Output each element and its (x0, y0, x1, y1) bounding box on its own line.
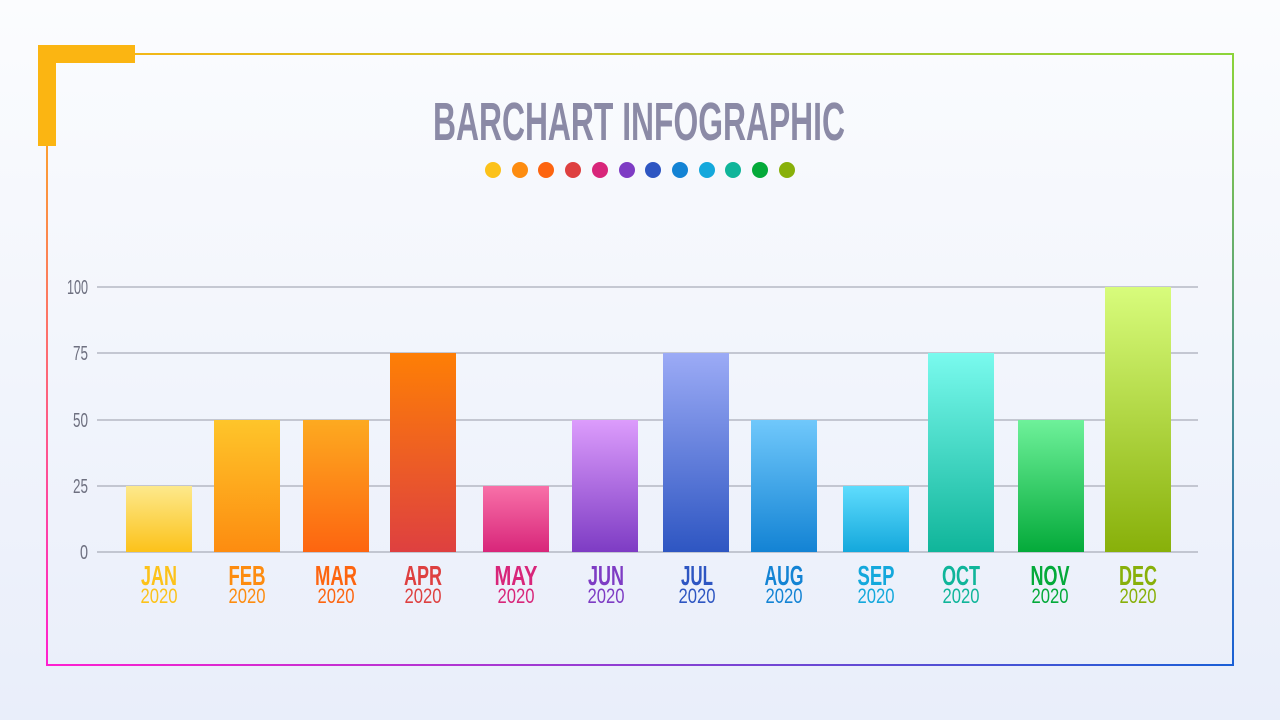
month labels (141, 560, 1157, 591)
year labels: 2020 (498, 585, 534, 608)
y axis labels: 100 (67, 277, 88, 299)
year labels: 2020 (318, 585, 354, 608)
month labels: DEC (1119, 560, 1157, 591)
month labels: JUN (588, 560, 624, 591)
month labels: OCT (942, 560, 980, 591)
month labels: JAN (141, 560, 177, 591)
y axis labels: 50 (73, 410, 88, 432)
year labels (140, 585, 1156, 608)
title: BARCHART INFOGRAPHIC (433, 92, 845, 152)
corner accent (38, 45, 135, 146)
year labels: 2020 (228, 585, 266, 608)
year labels: 2020 (858, 585, 894, 608)
year labels: 2020 (1120, 585, 1156, 608)
month labels: NOV (1030, 560, 1070, 591)
frame (46, 53, 1234, 666)
y axis labels (67, 277, 88, 564)
y axis labels: 0 (80, 542, 88, 564)
month labels: AUG (764, 560, 804, 591)
month labels: FEB (228, 560, 266, 591)
month labels: MAY (494, 560, 538, 591)
year labels: 2020 (404, 585, 442, 608)
year labels: 2020 (140, 585, 178, 608)
month labels: SEP (858, 560, 894, 591)
year labels: 2020 (1032, 585, 1068, 608)
bar chart (67, 277, 1198, 608)
year labels: 2020 (942, 585, 980, 608)
y axis labels: 75 (73, 343, 88, 365)
y axis labels: 25 (73, 476, 88, 498)
month labels: JUL (681, 560, 713, 591)
bars (126, 287, 1171, 552)
month labels: MAR (315, 560, 357, 591)
color dots (485, 162, 795, 178)
year labels: 2020 (678, 585, 716, 608)
year labels: 2020 (766, 585, 802, 608)
month labels: APR (404, 560, 442, 591)
year labels: 2020 (588, 585, 624, 608)
